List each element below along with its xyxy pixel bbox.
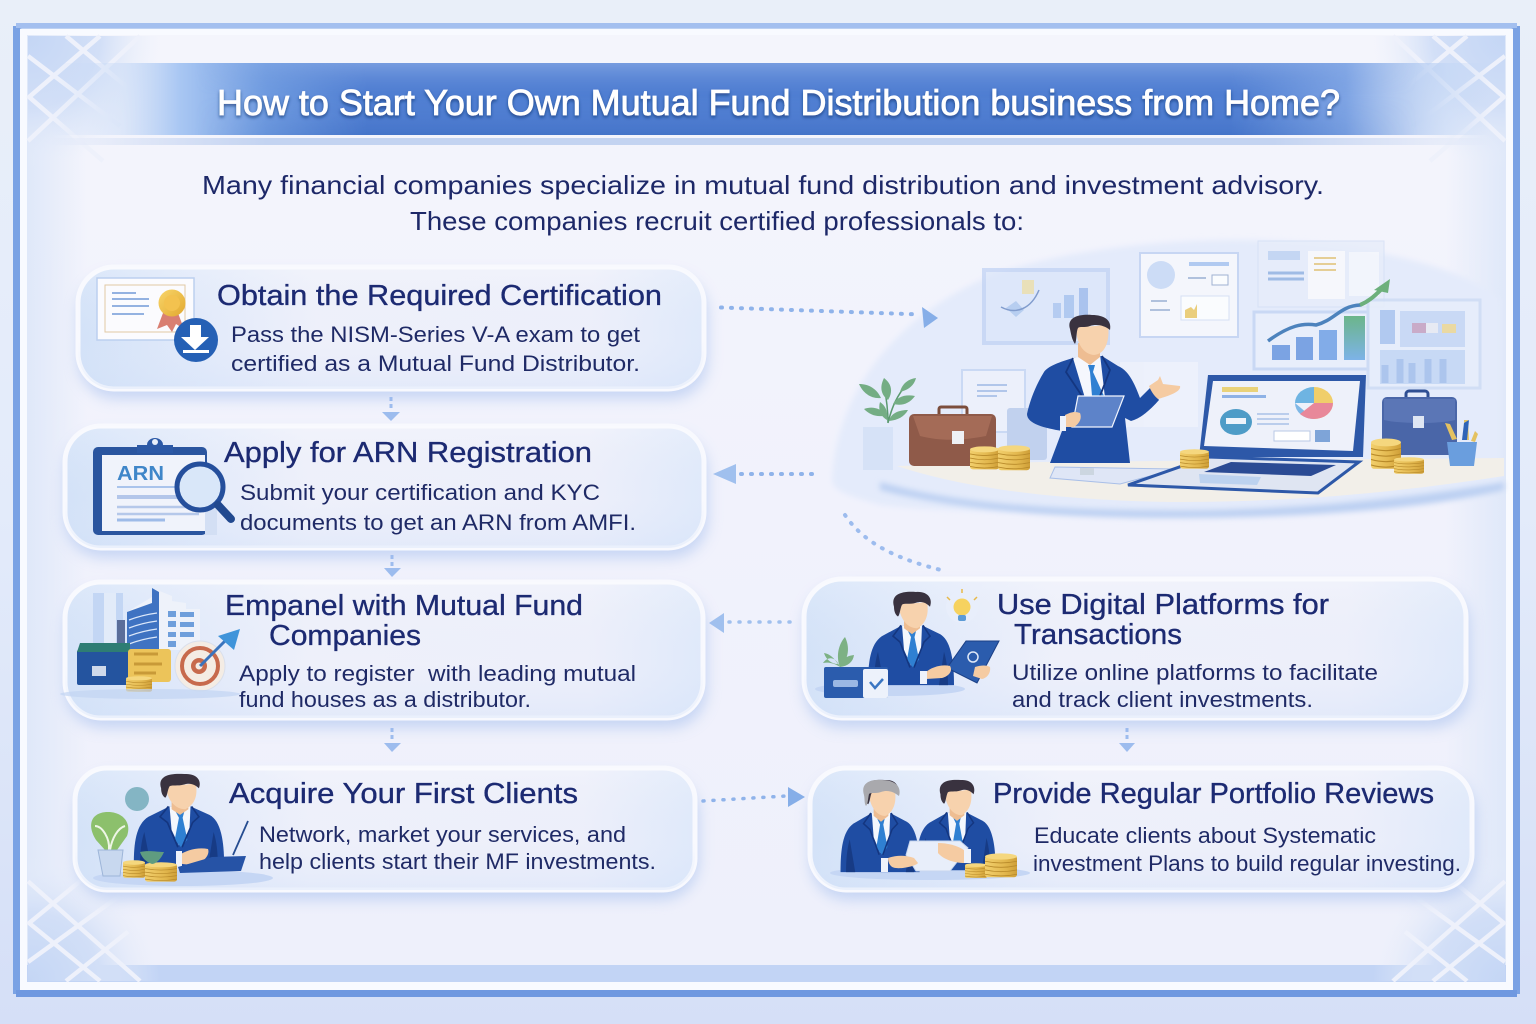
connector: digital platforms to reviews (1119, 728, 1135, 752)
title banner (50, 63, 1490, 145)
report panel (1140, 253, 1238, 337)
icon: certificate with download badge (97, 278, 218, 362)
icon: coins right (1371, 438, 1424, 474)
icon: advisor with plant, coins, laptop (91, 774, 273, 886)
heading (225, 590, 583, 652)
description (239, 661, 636, 712)
panel: empanel (60, 582, 707, 728)
connector: illustration to digital platforms (845, 515, 945, 571)
growth arrow (1268, 279, 1390, 341)
connector: clients to reviews (703, 787, 805, 807)
icon: pencil cup (1445, 420, 1478, 466)
connector: step 3 to step 4 (384, 728, 401, 752)
connector: step 2 to step 3 (384, 555, 401, 577)
description: Educate clients about Systematic (1034, 823, 1376, 848)
shelf (1368, 300, 1480, 388)
desk document (1050, 467, 1176, 484)
description: Apply to register with leading mutual (239, 661, 636, 686)
heading: Provide Regular Portfolio Reviews (993, 778, 1434, 810)
connector: digital platforms to empanel (709, 613, 790, 633)
heading: Companies (269, 620, 421, 652)
background documents (962, 362, 1198, 460)
description (259, 822, 656, 874)
connector: illustration to ARN (713, 464, 812, 484)
description (1012, 660, 1378, 712)
description (231, 322, 641, 376)
description: help clients start their MF investments. (259, 849, 656, 874)
icon: coins center (1180, 449, 1209, 469)
description (240, 480, 636, 535)
panel: ARN registration (65, 426, 708, 558)
panel: obtain certification (78, 267, 708, 399)
figure: advisor (1027, 315, 1180, 463)
panel: portfolio reviews (810, 768, 1476, 900)
connector: step 1 to step 2 (382, 397, 400, 421)
heading: Apply for ARN Registration (224, 437, 592, 469)
intro text: Many financial companies specialize in mutual fund distribution and investment advisory. (202, 170, 1324, 200)
description: Pass the NISM-Series V-A exam to get (231, 322, 641, 347)
heading: Use Digital Platforms for (997, 589, 1329, 621)
description: Network, market your services, and (259, 822, 626, 847)
icon: buildings, box, documents and target (60, 588, 240, 699)
heading: Acquire Your First Clients (229, 778, 578, 810)
heading: Obtain the Required Certification (217, 280, 662, 312)
description: documents to get an ARN from AMFI. (240, 510, 636, 535)
document panel top (1258, 241, 1384, 307)
illustration: advisor at desk (832, 240, 1504, 518)
desk (880, 458, 1504, 518)
icon: two advisors reviewing (830, 780, 1030, 880)
icon: plant (859, 378, 916, 470)
backdrop blob (832, 240, 1500, 512)
growth chart (1254, 312, 1368, 369)
description: and track client investments. (1012, 687, 1313, 712)
icon: laptop (1128, 375, 1366, 493)
description: investment Plans to build regular investing. (1033, 851, 1461, 876)
icon: blue briefcase (1382, 391, 1457, 455)
description: certified as a Mutual Fund Distributor. (231, 351, 640, 376)
heading: Empanel with Mutual Fund (225, 590, 583, 622)
icon: ARN clipboard with magnifier: ARN (117, 463, 164, 485)
icon: advisor with tablet (815, 589, 999, 698)
chart panel left (984, 270, 1108, 343)
description: Submit your certification and KYC (240, 480, 600, 505)
icon: ARN clipboard with magnifier (93, 438, 231, 535)
icon: brown briefcase (909, 407, 996, 466)
connector: certification to illustration (721, 307, 938, 328)
intro text: These companies recruit certified professionals to: (410, 206, 1024, 236)
description (1033, 823, 1461, 876)
heading: Transactions (1014, 619, 1182, 651)
panel: acquire clients (75, 768, 699, 900)
title: How to Start Your Own Mutual Fund Distribution business from Home? (217, 82, 1340, 123)
panel: digital platforms (804, 579, 1470, 728)
intro text (202, 170, 1324, 236)
icon: coins left (970, 445, 1030, 470)
description: Utilize online platforms to facilitate (1012, 660, 1378, 685)
heading (997, 589, 1329, 651)
description: fund houses as a distributor. (239, 687, 531, 712)
